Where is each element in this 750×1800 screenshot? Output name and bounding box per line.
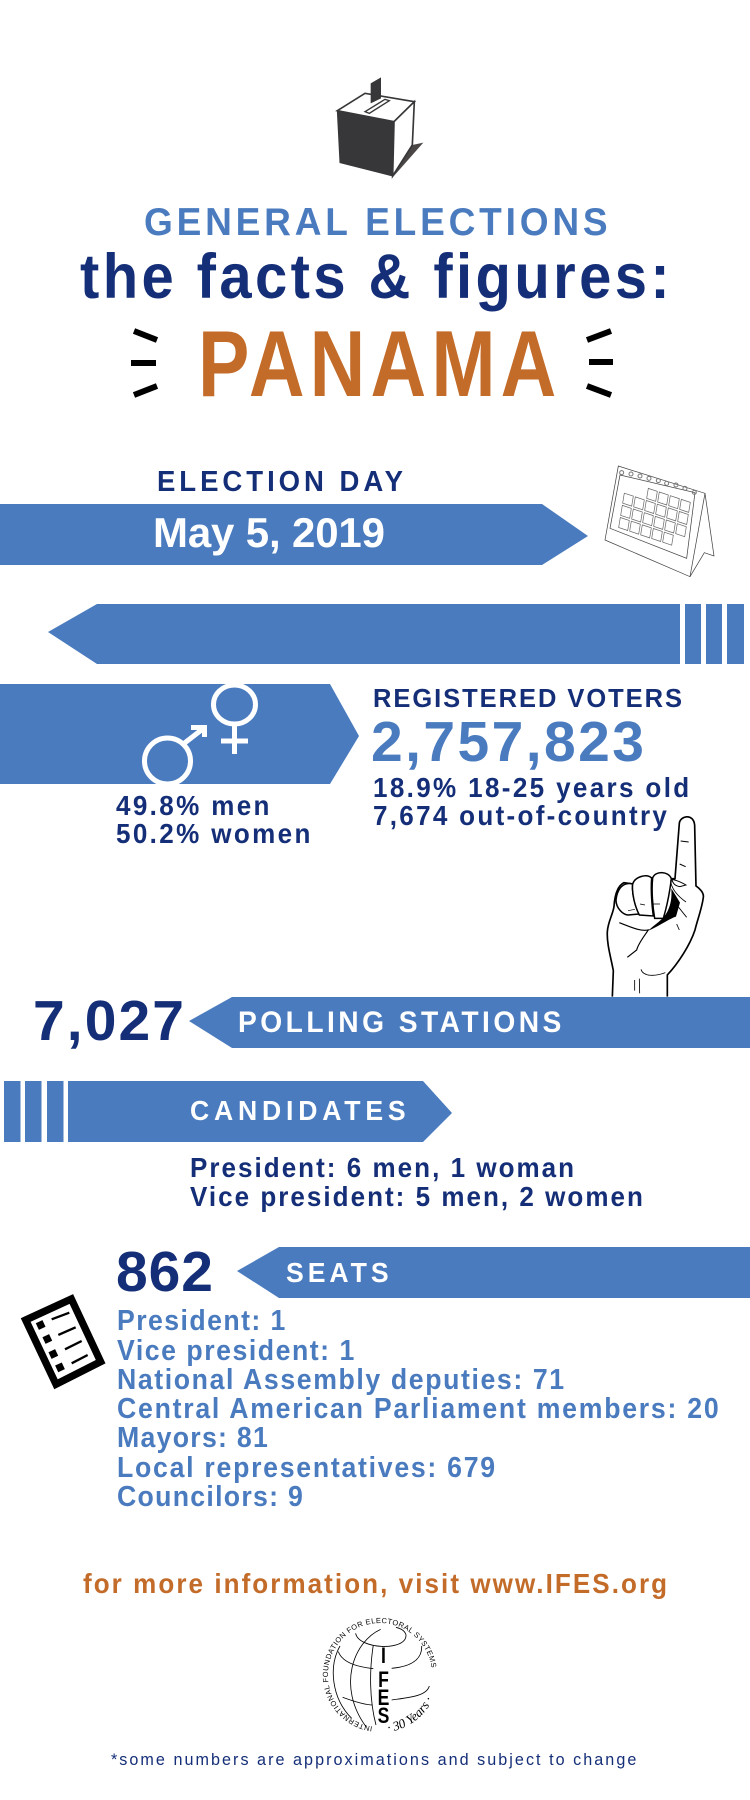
title: general elections: GENERAL ELECTIONS <box>144 201 608 244</box>
logo: IFES globe: E <box>378 1686 389 1711</box>
icon: right emphasis ticks <box>587 331 613 395</box>
panel: empty left-pointing pencil banner <box>48 604 744 664</box>
icon: left emphasis ticks <box>131 331 157 395</box>
text: share of women: 50.2% women <box>116 818 310 849</box>
list: seats breakdown: President: 1 <box>117 1304 285 1336</box>
candidates label: CANDIDATES <box>190 1094 406 1126</box>
text: presidential candidates: President: 6 men, 1 woman <box>190 1152 574 1183</box>
title: Panama: PANAMA <box>198 312 556 417</box>
list: seats breakdown: Mayors: 81 <box>117 1421 268 1453</box>
icon: desk calendar <box>605 466 714 577</box>
text: more information link: for more information, visit www.IFES.org <box>83 1568 667 1599</box>
logo: IFES globe: S <box>378 1704 389 1729</box>
logo: IFES globe: F <box>378 1668 389 1693</box>
stat: seats total: 862 <box>116 1240 213 1304</box>
list: seats breakdown <box>117 1304 719 1512</box>
stat: polling station count: 7,027 <box>33 989 184 1053</box>
footnote: *some numbers are approximations and subject to change <box>111 1750 636 1769</box>
list: seats breakdown: Central American Parliament members: 20 <box>117 1392 719 1424</box>
panel: polling stations banner <box>189 997 750 1048</box>
heading: registered voters: REGISTERED VOTERS <box>373 685 682 713</box>
heading: election day: ELECTION DAY <box>157 464 403 497</box>
list: seats breakdown: Local representatives: 679 <box>117 1451 495 1483</box>
list: seats breakdown: Vice president: 1 <box>117 1334 354 1366</box>
text: vice presidential candidates: Vice president: 5 men, 2 women <box>190 1181 643 1212</box>
panel: candidates banner <box>4 1081 452 1142</box>
election date: May 5, 2019 <box>153 509 385 556</box>
text: youth voter share: 18.9% 18-25 years old <box>373 772 689 803</box>
text: share of men: 49.8% men <box>116 790 269 821</box>
logo: IFES globe: INTERNATIONAL FOUNDATION FOR ELECTORAL SYSTEMS <box>322 1618 436 1732</box>
panel: gender banner <box>0 684 359 784</box>
seats label: SEATS <box>286 1256 389 1288</box>
panel: election date banner <box>0 504 588 565</box>
icon: male symbol <box>144 728 204 784</box>
panel: seats banner <box>237 1247 750 1298</box>
icon: ballot box <box>337 77 423 177</box>
logo: IFES globe: · 30 Years · <box>388 1698 430 1731</box>
icon: hand pointing up <box>607 817 703 997</box>
polling stations label: POLLING STATIONS <box>238 1006 561 1039</box>
list: seats breakdown: Councilors: 9 <box>117 1480 303 1512</box>
list: seats breakdown: National Assembly deputies: 71 <box>117 1363 564 1395</box>
stat: registered voter count: 2,757,823 <box>371 710 644 774</box>
icon: female symbol <box>214 685 256 754</box>
logo: IFES globe: I <box>381 1644 386 1669</box>
icon: checklist <box>26 1299 101 1384</box>
text: out-of-country voters: 7,674 out-of-country <box>373 800 667 831</box>
title: the facts and figures: the facts & figures: <box>80 241 670 312</box>
